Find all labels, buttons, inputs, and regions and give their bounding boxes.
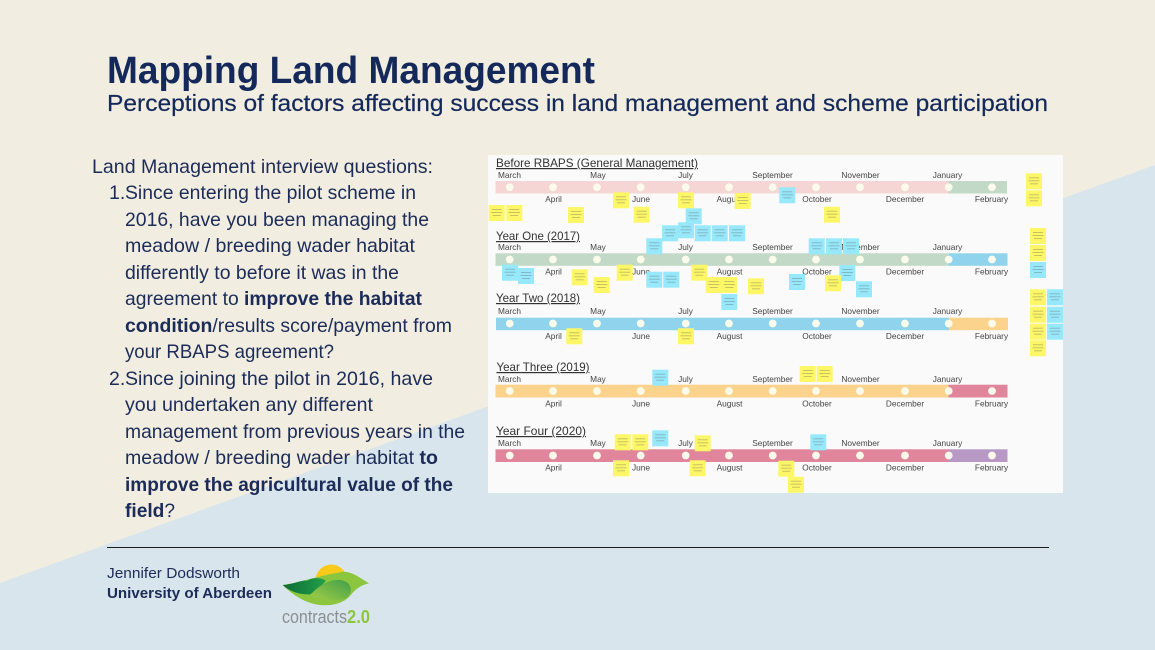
timeline: year two xyxy=(496,291,1009,341)
text block: interview questions: meadow / breeding wader habitat xyxy=(125,235,416,257)
affiliation: University of Aberdeen xyxy=(107,586,272,602)
text block: interview questions: Land Management interview questions: xyxy=(92,156,433,178)
timeline: year two: Year Two (2018) xyxy=(496,291,580,305)
timeline: before RBAPS: Before RBAPS (General Management) xyxy=(496,156,698,170)
text block: interview questions: 2. xyxy=(109,368,125,390)
text block: interview questions: Since entering the pilot scheme in xyxy=(125,182,416,204)
text block: interview questions: meadow / breeding wader habitat to xyxy=(125,447,438,469)
timeline: year one xyxy=(496,229,1009,276)
text block: interview questions: Since joining the pilot in 2016, have xyxy=(125,368,433,390)
subtitle: Perceptions of factors affecting success in land management and scheme participation xyxy=(107,90,1048,116)
logo: contracts 2.0 xyxy=(282,565,370,627)
logo: contracts 2.0: contracts xyxy=(282,607,347,627)
text block: interview questions: 2016, have you been managing the xyxy=(125,209,429,231)
text block: interview questions: management from previous years in the xyxy=(125,421,465,443)
text block: interview questions: your RBAPS agreement? xyxy=(125,341,334,363)
text block: interview questions: agreement to improve the habitat xyxy=(125,288,422,310)
timeline: year three xyxy=(496,360,1009,408)
text block: interview questions: field? xyxy=(125,500,175,522)
sticky notes xyxy=(489,173,1063,493)
footer divider xyxy=(107,547,1049,548)
timeline: year four xyxy=(496,424,1009,472)
background diagonal panel xyxy=(0,165,1155,650)
text block: interview questions: improve the agricultural value of the xyxy=(125,474,453,496)
author name: Jennifer Dodsworth xyxy=(107,566,240,582)
timeline: year four: Year Four (2020) xyxy=(496,424,586,438)
text block: interview questions: 1. xyxy=(109,182,125,204)
text block: interview questions xyxy=(92,156,465,522)
timeline: before RBAPS xyxy=(496,156,1009,204)
text block: interview questions: differently to before it was in the xyxy=(125,262,399,284)
timeline: year three: Year Three (2019) xyxy=(496,360,590,374)
text block: interview questions: condition/results score/payment from xyxy=(125,315,452,337)
timeline: year one: Year One (2017) xyxy=(496,229,580,243)
title: Mapping Land Management xyxy=(107,50,595,92)
panel: land management timeline xyxy=(488,155,1063,493)
logo: contracts 2.0: 2.0 xyxy=(347,607,370,627)
text block: interview questions: you undertaken any different xyxy=(125,394,374,416)
